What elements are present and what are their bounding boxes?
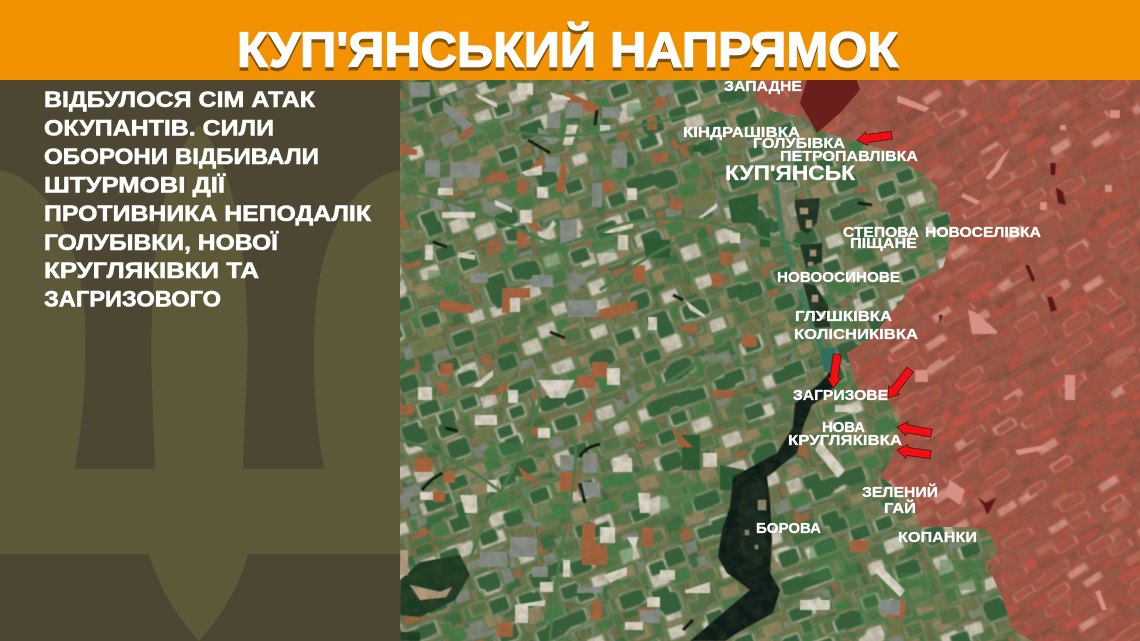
map labels: settlements: СТЕПОВА [843, 224, 919, 241]
map labels: settlements: ЗАГРИЗОВЕ [793, 387, 888, 404]
occupied zone fields [897, 95, 1120, 610]
text block: attack summary [44, 87, 371, 312]
orange ploughed fields [400, 90, 905, 637]
text block: attack summary: ПРОТИВНИКА НЕПОДАЛІК [44, 201, 371, 226]
header bar [0, 0, 1140, 81]
map labels: settlements [683, 78, 1041, 546]
text block: attack summary: ВІДБУЛОСЯ СІМ АТАК [44, 87, 315, 112]
dark green woods [643, 145, 770, 490]
map labels: settlements: КІНДРАШІВКА [683, 124, 800, 141]
map labels: settlements: ПЕТРОПАВЛІВКА [780, 148, 918, 165]
text block: attack summary: ОКУПАНТІВ. СИЛИ [44, 116, 274, 140]
text block: attack summary: ЗАГРИЗОВОГО [44, 286, 221, 312]
text block: attack summary: ГОЛУБІВКИ, НОВОЇ [44, 230, 279, 255]
arrow: attack on Zahryzove from north [826, 353, 844, 389]
map labels: settlements: НОВА [822, 419, 865, 436]
occupied zone ponds [939, 163, 1066, 515]
map labels: settlements: БОРОВА [756, 520, 821, 537]
map labels: settlements: ЗАПАДНЕ [724, 78, 802, 95]
map labels: settlements: ГЛУШКІВКА [795, 308, 892, 325]
icon: trident watermark [0, 125, 400, 641]
bright green fields [400, 103, 985, 625]
text block: attack summary: ШТУРМОВІ ДІЇ [44, 172, 226, 198]
white fields [418, 83, 905, 630]
dark red forest patch [800, 80, 860, 133]
map labels: settlements: НОВООСИНОВЕ [777, 269, 900, 286]
title: КУП'ЯНСЬКИЙ НАПРЯМОК [237, 26, 898, 81]
wood at bottom-left [400, 555, 470, 641]
text block: attack summary: ОБОРОНИ ВІДБИВАЛИ [44, 144, 319, 169]
reservoir [690, 372, 838, 641]
map labels: settlements: КОЛІСНИКІВКА [794, 326, 918, 343]
map labels: settlements: ГАЙ [884, 499, 916, 517]
map labels: settlements: ЗЕЛЕНИЙ [862, 483, 938, 501]
map labels: settlements: КРУГЛЯКІВКА [788, 432, 902, 449]
arrow: attack on Nova Kruhliakivka upper [896, 420, 933, 440]
map labels: settlements: КУП'ЯНСЬК [725, 162, 855, 185]
black dams [422, 110, 872, 630]
title: КУП'ЯНСЬКИЙ НАПРЯМОК [237, 22, 898, 78]
map labels: settlements: ГОЛУБІВКА [753, 135, 845, 152]
roads and green channels [400, 100, 800, 640]
grey fields [410, 82, 900, 623]
map: satellite base [400, 80, 1140, 641]
arrow: attack on Holubivka [856, 128, 893, 147]
occupied zone overlay [740, 80, 1140, 641]
town area [778, 182, 802, 290]
map labels: settlements: НОВОСЕЛІВКА [925, 224, 1041, 241]
panel: left text panel [0, 80, 400, 641]
text block: attack summary: КРУГЛЯКІВКИ ТА [44, 258, 259, 283]
arrow: attack on Nova Kruhliakivka lower [896, 443, 932, 462]
forests along the river [793, 198, 830, 328]
arrow: attack on Zahryzove from east [882, 365, 916, 402]
river channel [775, 185, 826, 362]
map labels: settlements: КОПАНКИ [898, 529, 977, 546]
map labels: settlements: ПІЩАНЕ [850, 235, 917, 252]
